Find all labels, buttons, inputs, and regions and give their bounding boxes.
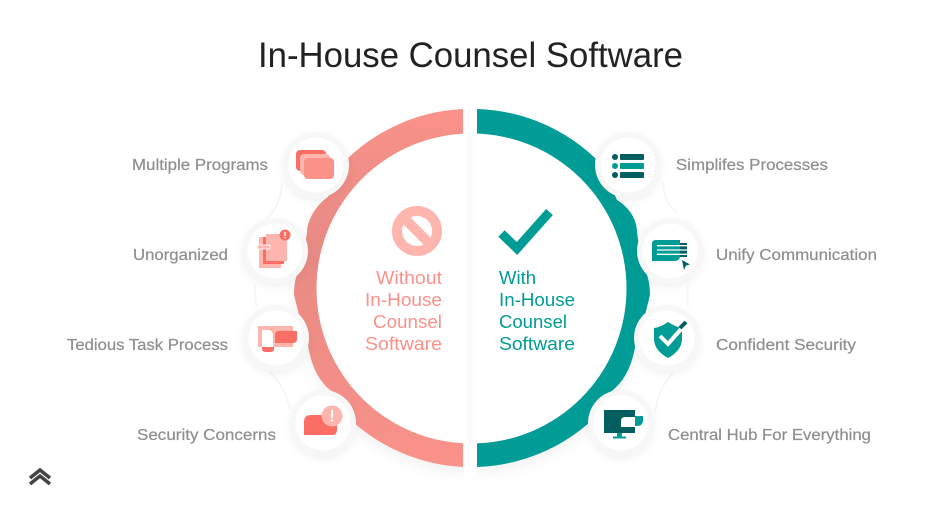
title: In-House Counsel Software [258, 35, 683, 75]
connector outlines [255, 182, 688, 413]
text: with: With [499, 267, 536, 288]
text: without: In-House [365, 289, 442, 310]
item: unify communication [637, 218, 877, 284]
text: with: Software [499, 333, 575, 354]
centre white disc [316, 100, 626, 475]
icon: check mark [502, 212, 550, 248]
item: security concerns [137, 390, 356, 456]
item: tedious task process [67, 305, 309, 371]
item: tedious task process: Tedious Task Process [67, 337, 228, 354]
text: with [499, 267, 575, 354]
text: with: Counsel [499, 311, 567, 332]
item: unorganized [133, 218, 308, 284]
text: without: Software [365, 333, 442, 354]
item: simplifes processes: Simplifes Processes [676, 157, 828, 174]
item: central hub: Central Hub For Everything [668, 427, 871, 444]
text: without: Counsel [373, 311, 442, 332]
item: unorganized: Unorganized [133, 247, 228, 264]
item: unify communication: Unify Communication [716, 247, 877, 264]
panel: without ring [294, 109, 463, 467]
panel: with ring [477, 109, 650, 467]
text: with: In-House [499, 289, 575, 310]
icon: prohibited sign [397, 211, 437, 251]
item: multiple programs: Multiple Programs [132, 157, 268, 174]
item: confident security: Confident Security [716, 337, 856, 354]
icon: logo chevrons [30, 470, 50, 484]
item: multiple programs [132, 132, 349, 198]
text: without: Without [376, 267, 442, 288]
item: simplifes processes [595, 132, 828, 198]
item: confident security [634, 305, 856, 371]
item: security concerns: Security Concerns [137, 427, 276, 444]
item: central hub [588, 390, 871, 456]
text: without [365, 267, 442, 354]
